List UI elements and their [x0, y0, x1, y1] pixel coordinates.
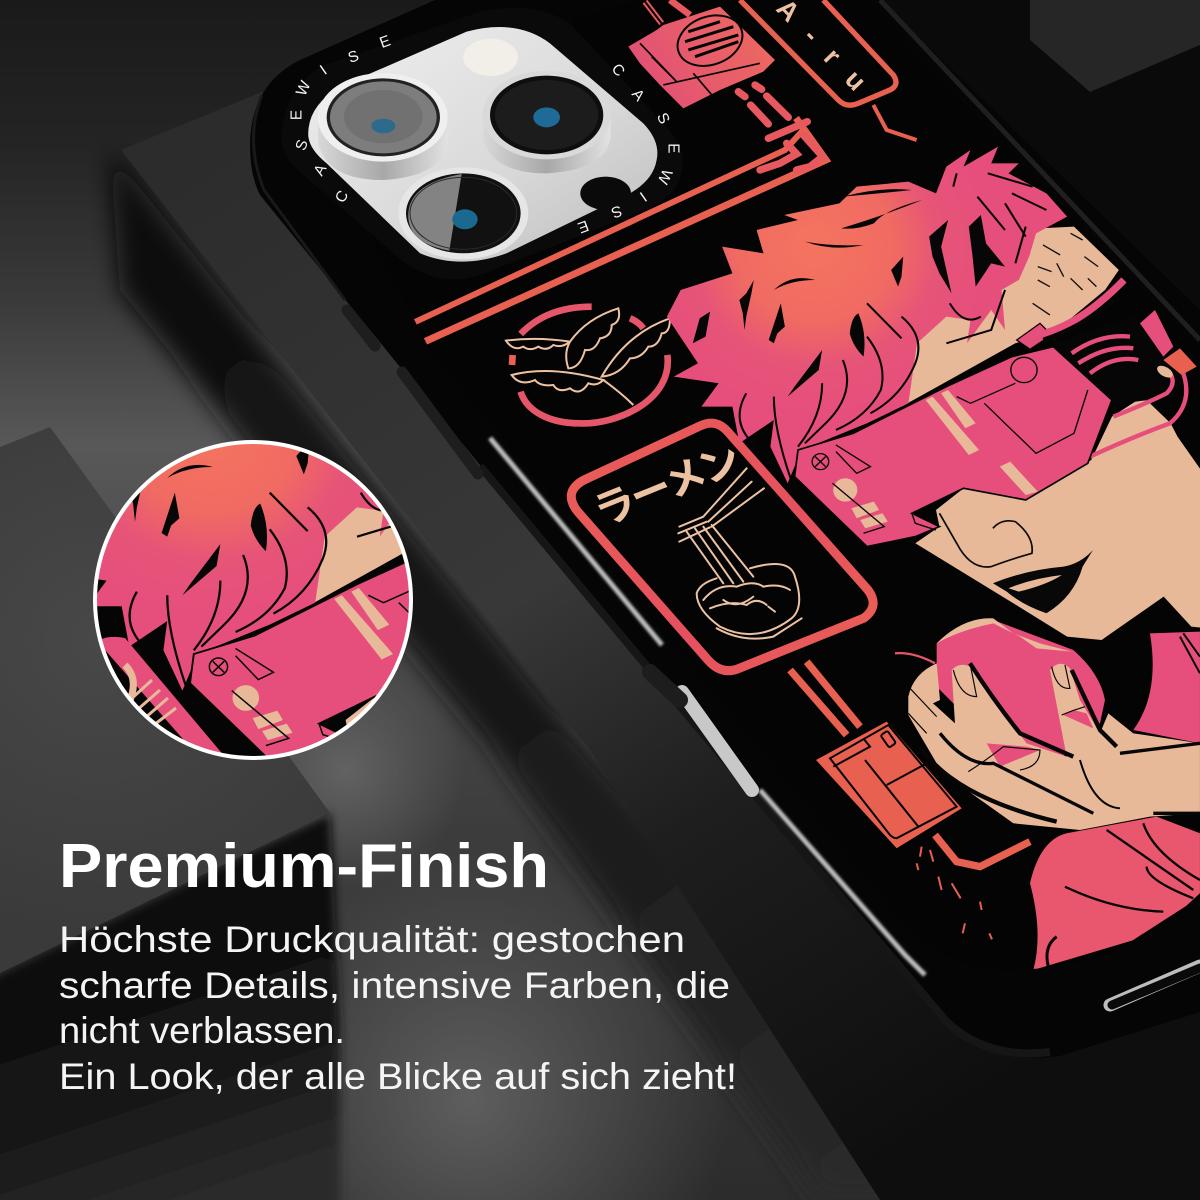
body text: Ein Look, der alle Blicke auf sich zieht! — [59, 1056, 737, 1097]
brand lettering: C — [608, 61, 628, 80]
side buttons — [347, 310, 752, 790]
brand lettering: I — [636, 188, 650, 204]
mouth — [993, 550, 1093, 613]
detail magnifier circle — [93, 440, 413, 760]
hair and visor head — [667, 147, 1200, 640]
apple and hand — [895, 618, 1200, 970]
visor — [795, 347, 1112, 547]
apple — [937, 620, 1105, 757]
hair ink strokes — [693, 189, 1005, 397]
brand lettering: E — [575, 216, 591, 236]
brand lettering: S — [609, 201, 624, 221]
brand lettering: W — [654, 166, 675, 187]
rim highlights — [490, 438, 925, 975]
pipes — [415, 118, 826, 342]
neon sign top — [740, 0, 917, 140]
block side face with soft lower edge — [110, 150, 1000, 1200]
main lens — [318, 73, 448, 180]
ultra-wide lens — [398, 167, 528, 259]
brand lettering: I — [317, 62, 330, 79]
leaf emblem — [506, 307, 670, 423]
sign katakana: ラーメン — [585, 437, 749, 534]
camera plateau — [308, 27, 657, 262]
left block top — [0, 427, 330, 973]
hair — [667, 147, 1067, 483]
body text: Höchste Druckqualität: gestochen — [59, 919, 685, 960]
lower device and wires — [790, 662, 1030, 939]
right cheek and jaw — [915, 397, 1200, 640]
charging port — [1110, 966, 1200, 1005]
brand lettering: E — [289, 110, 306, 120]
stem — [895, 653, 935, 663]
left block front — [0, 813, 340, 1200]
brand lettering: A — [628, 86, 648, 105]
printed artwork — [414, 0, 1200, 969]
goggle mechanics — [1017, 280, 1197, 457]
upper right blocks — [1030, 0, 1200, 92]
ramen sign — [571, 423, 873, 671]
hand — [908, 664, 1200, 830]
telephoto lens — [483, 71, 611, 173]
brand lettering: S — [346, 47, 361, 67]
body text — [59, 919, 737, 1097]
brand lettering: S — [653, 110, 673, 127]
device: top radio — [628, 0, 823, 170]
lidar sensor — [580, 177, 631, 210]
brand lettering: S — [292, 137, 312, 153]
brand lettering: E — [664, 143, 681, 153]
brand lettering: W — [293, 78, 315, 99]
pink sleeves — [1133, 632, 1200, 743]
camera ring — [282, 8, 683, 279]
nose — [939, 513, 1032, 567]
heading: Premium-Finish — [59, 832, 549, 901]
forehead skin — [902, 227, 1119, 407]
flash — [463, 39, 518, 76]
body text: scharfe Details, intensive Farben, die — [59, 965, 730, 1006]
phone case body — [250, 0, 1200, 1058]
chopsticks and noodle bowl — [678, 468, 802, 639]
brand lettering — [289, 32, 681, 236]
brand lettering: C — [332, 188, 352, 206]
brand lettering: E — [377, 32, 393, 52]
body text: nicht verblassen. — [59, 1010, 345, 1051]
sign corner in magnifier — [102, 636, 222, 753]
camera island — [282, 8, 683, 279]
brand lettering: A — [311, 161, 331, 179]
